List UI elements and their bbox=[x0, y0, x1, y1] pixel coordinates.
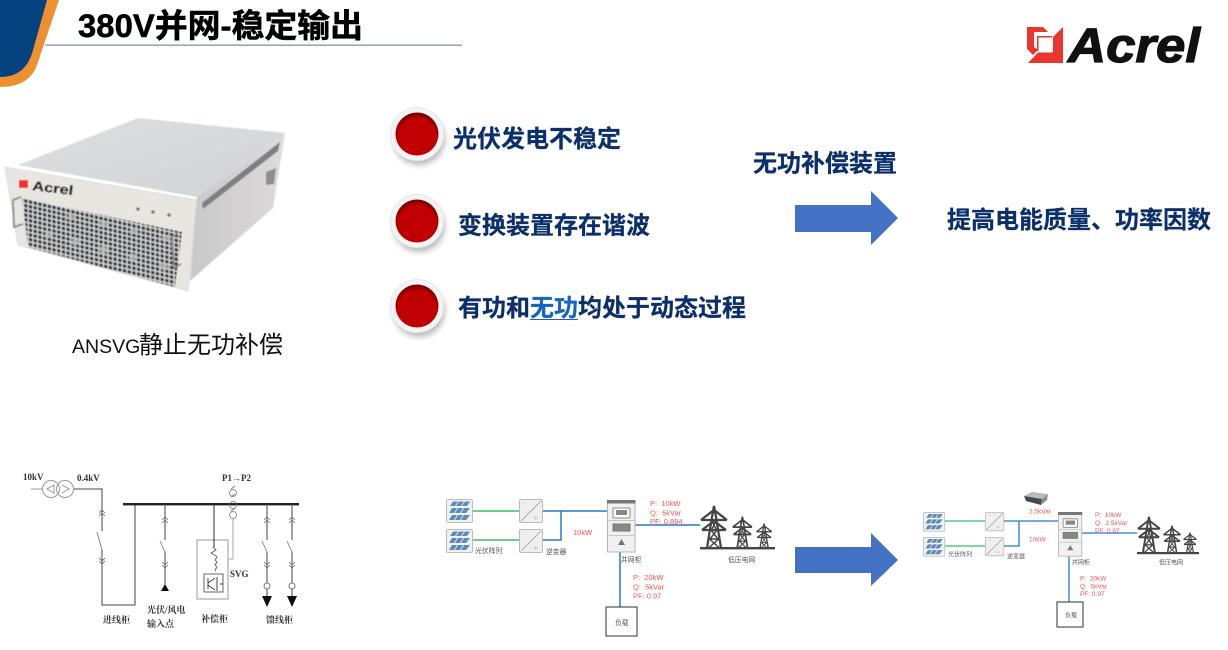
product caption: ANSVG bbox=[72, 336, 140, 358]
outgoing feeder 1 bbox=[262, 504, 272, 607]
readings: 10kW bbox=[1029, 536, 1046, 544]
labels: 逆变器 bbox=[1007, 552, 1025, 560]
header corner decoration bbox=[0, 0, 59, 87]
PV panels bbox=[923, 512, 945, 556]
green DC lines bbox=[473, 511, 519, 540]
result text: 提高电能质量、功率因数 bbox=[947, 207, 1211, 234]
bullet text 3: 有功和无功均处于动态过程 bbox=[458, 295, 746, 322]
readings: P: 10kW bbox=[1095, 512, 1122, 519]
diagram labels: SVG bbox=[230, 569, 249, 579]
readings: P: 20kW bbox=[1080, 576, 1107, 582]
inverters bbox=[520, 500, 542, 552]
labels bbox=[948, 550, 1183, 620]
handles bbox=[13, 197, 181, 268]
readings: PF: 0.97 bbox=[1095, 528, 1120, 535]
labels: 负载 bbox=[615, 618, 629, 627]
voltage labels bbox=[23, 472, 100, 483]
bullet 1 bbox=[390, 108, 445, 165]
readings: Q: 2.5kVar bbox=[1095, 520, 1128, 527]
readings: Q: 5kVar bbox=[1080, 584, 1108, 590]
PV panels bbox=[446, 500, 472, 552]
grid cabinet bbox=[1058, 512, 1082, 556]
labels: 光伏阵列 bbox=[948, 550, 972, 558]
diagram labels: 进线柜 bbox=[103, 614, 130, 625]
readings bbox=[573, 499, 683, 600]
load box bbox=[606, 607, 637, 636]
readings: PF: 0.894 bbox=[650, 517, 683, 526]
front panel bbox=[5, 167, 197, 291]
arrow: top bbox=[795, 191, 898, 245]
diagram labels: 补偿柜 bbox=[201, 613, 228, 624]
voltage labels: 10kV bbox=[23, 472, 44, 482]
cabinet side bbox=[190, 133, 285, 281]
SVG compensation cabinet bbox=[197, 504, 233, 599]
labels: 并网柜 bbox=[621, 555, 642, 564]
product caption: 静止无功补偿 bbox=[139, 332, 283, 359]
arrow: bottom bbox=[795, 533, 898, 586]
logo wordmark: Acrel bbox=[1067, 20, 1202, 73]
indicator lamps bbox=[136, 207, 171, 217]
bullet 3 bbox=[390, 280, 445, 337]
readings bbox=[1029, 508, 1128, 598]
front logo bbox=[19, 178, 74, 198]
front grille bbox=[22, 198, 182, 287]
readings: 10kW bbox=[573, 528, 593, 537]
voltage labels: 0.4kV bbox=[77, 473, 100, 483]
labels: 逆变器 bbox=[546, 547, 567, 556]
busbar bbox=[123, 503, 299, 505]
P1 P2 meter symbol bbox=[222, 473, 251, 518]
blue AC lines bbox=[1004, 521, 1137, 602]
bullet text 2: 变换装置存在谐波 bbox=[458, 212, 650, 240]
system diagram: after compensation bbox=[923, 492, 1199, 627]
PV / wind feeder bbox=[160, 504, 169, 591]
bullet 2 bbox=[390, 194, 445, 252]
readings: P: 10kW bbox=[650, 499, 681, 508]
incoming line bbox=[74, 489, 135, 605]
grid cabinet bbox=[607, 500, 636, 552]
load box bbox=[1057, 602, 1083, 627]
labels: 并网柜 bbox=[1072, 558, 1090, 566]
green DC lines bbox=[945, 521, 985, 546]
single-line diagram bbox=[23, 472, 299, 629]
transmission towers bbox=[1137, 517, 1199, 554]
readings: 2.5kVar bbox=[1029, 508, 1052, 516]
diagram labels bbox=[103, 569, 293, 629]
logo mark bbox=[1027, 27, 1063, 63]
inverters bbox=[985, 512, 1004, 556]
system diagram: before compensation bbox=[446, 499, 775, 636]
labels bbox=[475, 546, 755, 627]
cabinet top bbox=[18, 118, 285, 197]
bullet text 1: 光伏发电不稳定 bbox=[453, 126, 621, 153]
diagram labels: 输入点 bbox=[147, 618, 175, 629]
label: reactive compensation device: 无功补偿装置 bbox=[753, 150, 897, 178]
front logo: Acrel bbox=[32, 178, 74, 198]
labels: 低压电网 bbox=[1159, 558, 1183, 566]
labels: 光伏阵列 bbox=[475, 546, 502, 555]
diagram labels: 馈线柜 bbox=[266, 614, 293, 625]
transmission towers bbox=[700, 506, 775, 549]
P1 P2 meter symbol: P1→P2 bbox=[222, 473, 251, 483]
Acrel logo bbox=[1027, 20, 1202, 73]
readings: PF: 0.97 bbox=[633, 592, 661, 600]
title underline bbox=[45, 44, 462, 46]
blue AC lines bbox=[543, 511, 700, 607]
product photo: ANSVG cabinet bbox=[5, 118, 285, 291]
labels: 负载 bbox=[1065, 612, 1077, 620]
readings: Q: 5kVar bbox=[633, 582, 665, 592]
readings: P: 20kW bbox=[633, 573, 664, 582]
readings: Q: 5kVar bbox=[650, 508, 682, 518]
mini SVG device bbox=[1024, 492, 1048, 505]
title: 380V并网-稳定输出 bbox=[78, 8, 363, 44]
transformer bbox=[31, 480, 80, 498]
labels: 低压电网 bbox=[728, 555, 755, 564]
readings: PF: 0.97 bbox=[1080, 591, 1105, 598]
outgoing feeder 2 bbox=[287, 504, 297, 607]
diagram labels: 光伏/风电 bbox=[147, 604, 186, 615]
